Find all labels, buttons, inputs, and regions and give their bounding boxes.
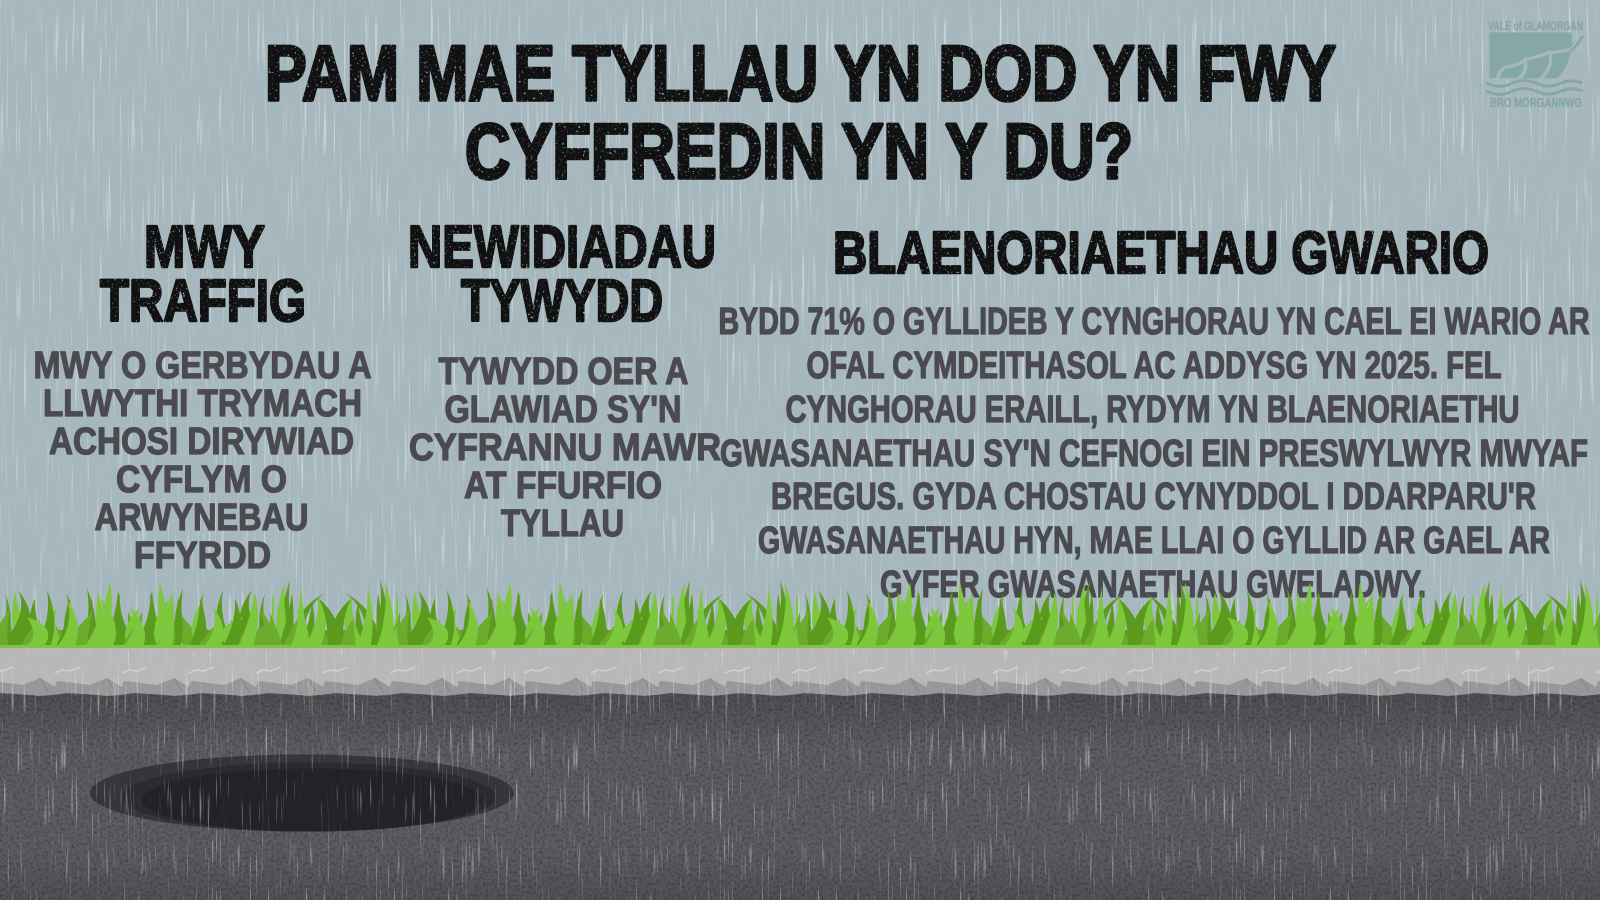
text block: weather changes: [409, 351, 721, 545]
text block: weather changes: TYWYDD OER A: [438, 351, 688, 393]
title: [265, 29, 1336, 195]
logo: Vale of Glamorgan: [1487, 19, 1584, 110]
text block: spending priorities: [718, 301, 1590, 606]
text block: more traffic: CYFLYM O: [116, 459, 287, 501]
rain over the road: [0, 650, 1600, 900]
pothole: [90, 754, 514, 832]
text block: more traffic: MWY O GERBYDAU A: [34, 345, 372, 387]
kerb: [0, 648, 1600, 700]
text block: weather changes: AT FFURFIO: [464, 465, 662, 507]
text block: weather changes: TYLLAU: [501, 503, 624, 545]
text block: spending priorities: GYFER GWASANAETHAU GWELADWY.: [880, 564, 1426, 606]
text block: weather changes: CYFRANNU MAWR: [409, 427, 721, 469]
background: rainy sky: [0, 0, 1600, 660]
heading: more traffic: MWY: [144, 214, 265, 280]
rain over the sky: [0, 0, 1600, 650]
heading: more traffic: TRAFFIG: [100, 268, 306, 334]
heading: weather changes: NEWIDIADAU: [408, 214, 716, 280]
text block: more traffic: [34, 345, 372, 577]
heading: weather changes: [408, 214, 716, 334]
title: PAM MAE TYLLAU YN DOD YN FWY: [265, 29, 1336, 117]
text block: weather changes: GLAWIAD SY'N: [444, 389, 682, 431]
text block: more traffic: ACHOSI DIRYWIAD: [49, 421, 354, 463]
text block: more traffic: LLWYTHI TRYMACH: [43, 383, 362, 425]
title: CYFFREDIN YN Y DU?: [465, 107, 1133, 195]
road surface: [0, 690, 1600, 900]
heading: weather changes: TYWYDD: [461, 268, 663, 334]
grass strip: [0, 580, 1600, 648]
heading: more traffic: [100, 214, 306, 334]
text block: more traffic: ARWYNEBAU: [94, 497, 308, 539]
text block: more traffic: FFYRDD: [134, 535, 271, 577]
